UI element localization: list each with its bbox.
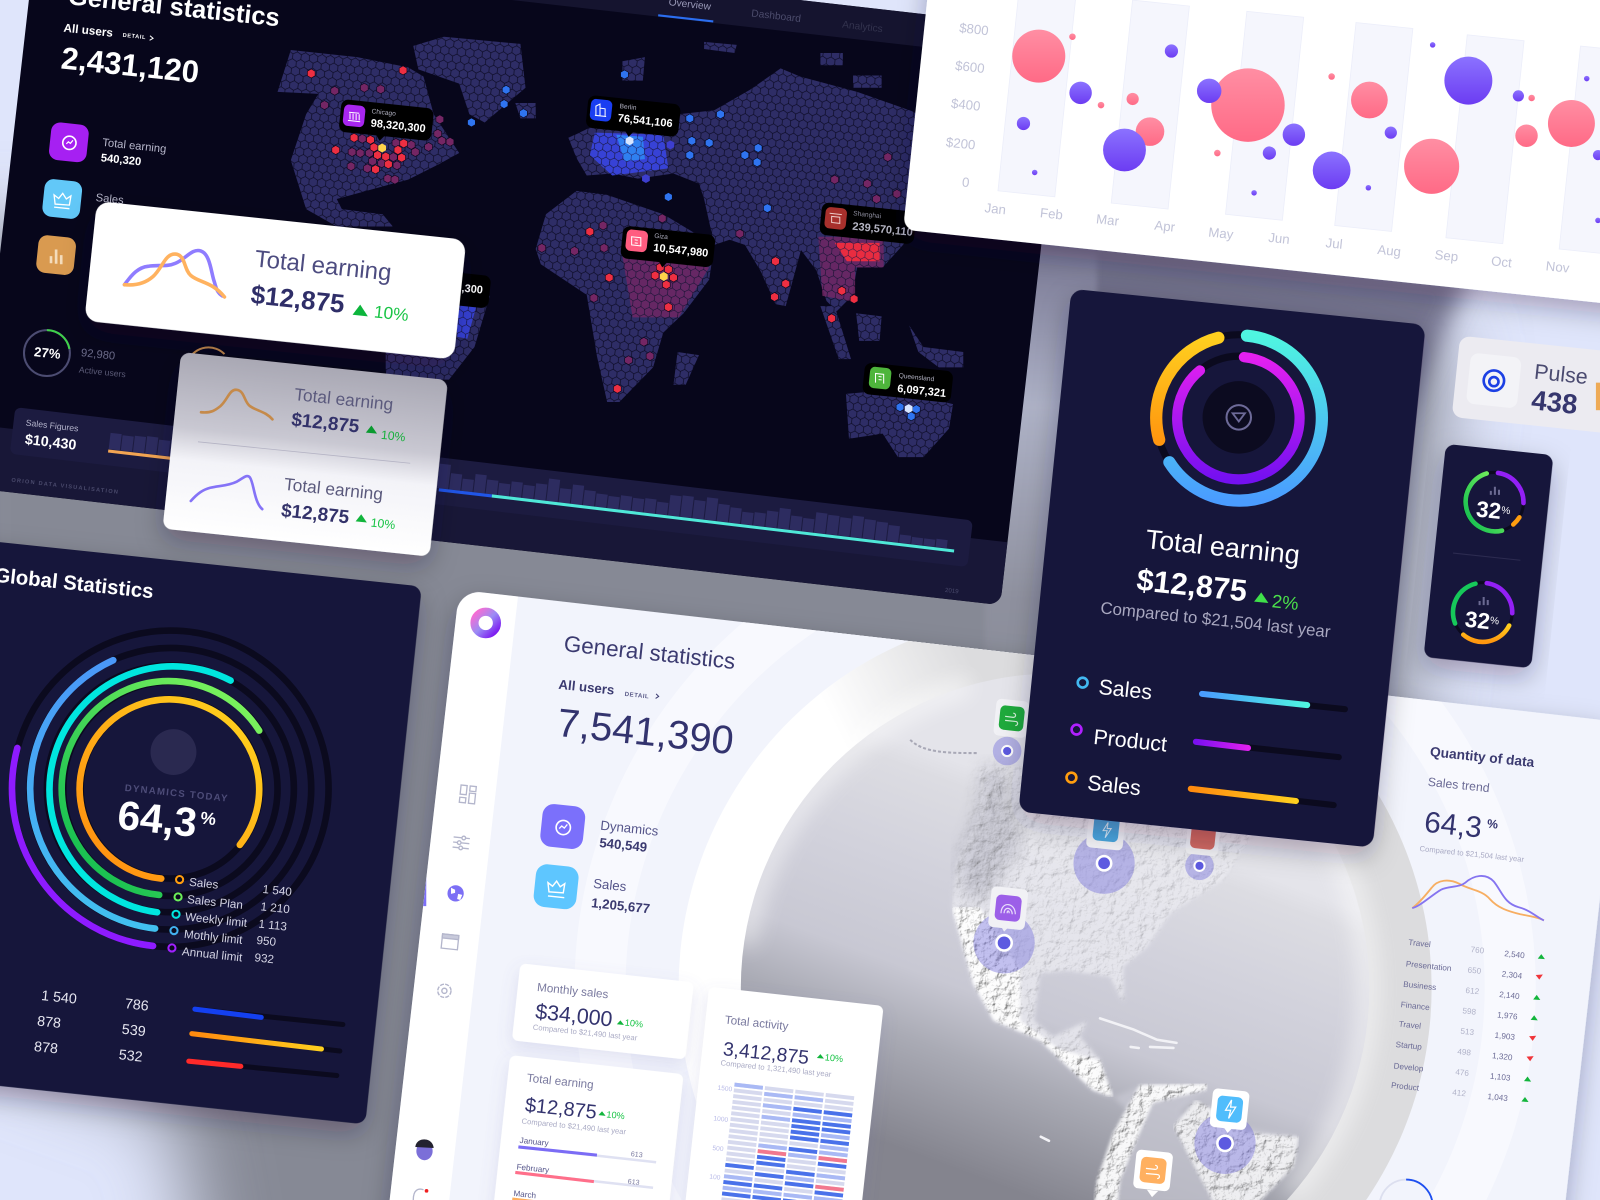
footer band: 2019 [945,587,960,595]
summary numbers: 786 [124,996,149,1015]
summary numbers: 532 [118,1047,143,1066]
label: Berlin [585,95,681,137]
data table: 476 [1455,1068,1470,1078]
y axis labels [945,20,989,190]
summary bars [189,1009,343,1076]
gauge one [1464,472,1523,532]
card: total activity heatmap: 3,412,875 [722,1038,810,1069]
data table: 2,140 [1499,990,1520,1001]
data table: 498 [1457,1047,1472,1058]
card: total earning stacked: 10% [380,428,406,444]
label: Queensland: Queensland [898,373,935,383]
heading: general statistics: General statistics [563,631,737,674]
icon: globe active [424,876,464,906]
gauge: active users 27% [24,330,224,379]
legend with progress bars: Sales [1086,771,1142,800]
ring legend: Annual limit [181,945,244,964]
ring legend: Sales [188,876,219,892]
ring legend: Sales Plan [186,893,244,912]
terrain: alaska range [910,740,978,753]
x axis labels: Oct [1490,253,1513,270]
terrain: south america base [1099,1084,1297,1200]
gauge one: 32 [1475,496,1502,524]
data table: 598 [1462,1006,1477,1017]
data table: 1,103 [1490,1072,1511,1083]
hexagon world map [278,37,980,457]
card: monthly sales: Compared to $21,490 last year [532,1023,638,1043]
card: total earning stacked: 10% [370,516,396,532]
card: total earning: Compared to $21,490 last year [521,1117,627,1136]
stat: sales: Sales [593,876,627,894]
ring legend: Weekly limit [184,910,248,930]
stat: sales: Sales [95,192,125,207]
label: Chicago: 98,320,300 [370,118,426,135]
summary numbers: 878 [33,1039,59,1057]
data table: Travel [1408,938,1431,949]
summary numbers: 1 540 [40,988,78,1008]
x axis labels: Nov [1545,258,1570,276]
all users total: All users [63,22,114,40]
x axis labels [984,200,1570,276]
decorative rings [574,507,1536,1200]
card: total earning: February [516,1162,550,1175]
pink bubbles [1012,30,1595,194]
card: total earning stacked: $12,875 [280,499,350,527]
card: total activity heatmap: 1000 [713,1115,729,1124]
y axis labels: $800 [958,20,989,38]
ring centre value: 64,3 [115,792,199,846]
radial progress rings [12,631,329,947]
card: monthly sales: Monthly sales [536,981,609,1001]
top navigation band [514,0,926,46]
purple bubbles [1017,42,1600,223]
data table: 2,304 [1501,970,1523,981]
label: Shanghai: Shanghai [853,210,882,220]
terrain: western mountains [957,767,1022,898]
stat: sales: 1,205,677 [591,895,651,916]
label: Chicago [338,99,434,141]
label: Giza: 10,547,980 [653,242,709,260]
sidebar [383,590,518,1200]
data table: Develop [1393,1061,1424,1074]
sales trend value: 64,3 [1423,806,1483,845]
x axis labels: Jan [984,200,1007,217]
panel: total earning rings: Compared to $21,504 last year [1100,598,1332,641]
label: Chicago: Chicago [371,108,396,118]
panel: small gauges [1424,444,1553,668]
card: total activity heatmap: Compared to 1,321,490 last year [720,1058,832,1079]
gauge one: % [1501,505,1511,517]
sales figures bar timeline [10,407,973,567]
avatar [407,1132,442,1170]
sales trend value [1419,775,1525,864]
stat: total earning: 540,320 [100,152,142,168]
all users total: DETAIL [122,33,146,41]
summary numbers: 878 [36,1014,62,1032]
data table: 650 [1467,965,1482,976]
map marker: south america [1133,1149,1173,1197]
card: total earning: January [519,1136,550,1148]
ring legend: 1 113 [258,918,288,934]
sales trend value: Compared to $21,504 last year [1419,844,1525,864]
stat: sales [533,863,651,916]
icon: card [441,934,459,950]
map marker: brazil [1194,1088,1256,1174]
x axis labels: Apr [1154,218,1176,235]
limb glow [1112,679,1368,1194]
x axis labels: Feb [1039,205,1064,223]
data table: 1,903 [1494,1031,1516,1042]
card: total earning: 613 [630,1150,643,1159]
x axis labels: Aug [1377,242,1402,259]
label: Berlin: Berlin [619,103,637,112]
card: total earning: 613 [627,1178,640,1187]
map marker: west canada [993,698,1029,765]
legend with progress bars [1067,675,1345,805]
terrain: mexico and central america ridge [952,907,1113,1097]
sparkline [124,250,224,297]
panel: global statistics [0,536,422,1124]
icon: sliders [452,835,470,851]
donut chart [1156,335,1322,501]
data table: Startup [1395,1040,1423,1052]
label: partly hidden city: 0,300 [455,282,483,297]
all users total: All users [558,677,615,698]
data table: Presentation [1405,959,1452,973]
stat: dynamics: 540,549 [599,835,648,855]
label: Shanghai: 239,570,110 [852,221,913,239]
map marker: east usa [1185,817,1221,880]
card: total activity heatmap: 100 [709,1174,721,1182]
gauge two: % [1489,616,1500,627]
gauge two [1453,583,1512,642]
label: Giza [620,226,716,268]
panel: total earning rings: $12,875 [1135,563,1249,608]
stat: dynamics [539,803,659,855]
card: total earning stacked: Total earning [293,384,394,414]
data table: 1,976 [1497,1010,1518,1022]
data table [1391,938,1545,1103]
map marker: central usa [1073,806,1135,894]
all users total [61,24,198,82]
stat: dynamics: Dynamics [600,818,659,839]
data table: 412 [1452,1088,1467,1098]
label: Giza: Giza [654,233,668,241]
heatmap grid [735,1084,840,1200]
card: total earning large: Total earning [253,245,393,287]
sales figures bar timeline: Sales Figures [25,418,80,434]
x axis labels: Mar [1095,211,1120,229]
data table: 2,540 [1504,949,1526,960]
ring legend: 1 210 [260,900,291,916]
terrain: brazil highlands [1173,1100,1299,1200]
total earning text: Total earning [1144,524,1301,570]
card: monthly sales [512,963,694,1059]
y axis labels: $600 [954,58,985,76]
card: total earning: March [513,1189,537,1200]
purple sparkline [191,476,262,509]
ring legend: Mothly limit [183,928,244,947]
y axis labels: 0 [961,174,970,190]
sales trend value: Sales trend [1427,775,1490,795]
logo [474,612,497,634]
gauge two: 32 [1464,607,1491,634]
card: total earning: Total earning [526,1072,594,1092]
gauge: active users 27%: Active users [78,364,127,379]
heading: quantity of data: Quantity of data [1429,744,1535,770]
card: total earning large: $12,875 [249,279,346,319]
card: total earning stacked: $12,875 [290,409,360,437]
panel: general statistics with globe [355,507,1600,1200]
gauge: active users 27%: 92,980 [80,347,116,363]
icon: settings gear [438,984,451,997]
legend with progress bars: Product [1092,725,1168,757]
month stripes [998,0,1600,255]
card: total earning stacked [163,352,448,557]
label: Queensland: 6,097,321 [897,383,947,400]
card: total earning stacked: Total earning [283,474,384,504]
terrain base: north america [952,766,1297,1097]
ring centre value: DYNAMICS TODAY [124,783,229,805]
card: pulse: Pulse [1533,360,1589,389]
x axis labels: May [1208,225,1234,242]
top navigation band: Dashboard [751,8,802,25]
card: total activity heatmap: 500 [712,1145,724,1153]
x axis labels: Jun [1268,230,1290,247]
footer band: ORION DATA VISUALISATION [11,478,119,496]
sales trend value: % [1486,817,1499,832]
data table: Travel [1398,1020,1422,1031]
card: monthly sales: 10% [624,1018,644,1029]
top navigation band: Analytics [841,20,883,35]
summary numbers: 539 [121,1022,146,1040]
card: total activity heatmap: 10% [824,1052,844,1064]
data table: Business [1403,980,1437,992]
data table: Finance [1400,1000,1431,1012]
ring centre value: % [200,808,217,829]
card: total earning: 10% [606,1109,625,1121]
card: pulse: 438 [1530,384,1579,420]
label: Queensland [862,362,954,403]
card: monthly sales: $34,000 [534,999,614,1031]
data table: Product [1391,1081,1420,1093]
footer band [0,425,1007,605]
ring legend [168,876,293,966]
data table: 1,043 [1487,1092,1509,1103]
card: total activity heatmap [682,987,884,1200]
ring centre value [115,729,229,846]
stat: total earning: Total earning [102,137,167,156]
terrain: andes ridge [1094,1084,1207,1200]
card: total earning large: 10% [373,301,410,325]
orange sparkline [201,390,272,419]
ring legend: 1 540 [262,883,293,899]
label: Berlin: 76,541,106 [617,112,673,130]
legend with progress bars: Sales [1097,675,1153,704]
stat: total earning [48,122,167,168]
label: partly hidden city [459,273,491,308]
gauge: active users 27%: 27% [33,344,62,362]
label: Shanghai [819,202,917,244]
map marker: mexico [973,886,1035,973]
summary numbers [33,988,149,1066]
all users total: DETAIL [624,691,650,700]
y axis labels: $200 [945,134,976,152]
icon: notification [413,1189,428,1200]
sales figures bar timeline: $10,430 [24,432,77,454]
icon: dashboard [459,785,476,804]
x axis labels: Sep [1434,247,1459,264]
globe [741,673,1369,1200]
icon: pulse [1484,370,1504,391]
terrain: caribbean islands [1041,1018,1177,1141]
ring legend: 932 [254,951,275,966]
all users total: 7,541,390 [555,701,736,763]
card: total earning large [84,201,466,360]
data table: 612 [1465,986,1480,996]
card: total activity heatmap: 1500 [717,1085,733,1093]
data table: 1,320 [1492,1051,1513,1062]
data table: 513 [1460,1027,1475,1037]
sales trend line chart [1412,876,1544,920]
stat: sales [41,178,125,220]
ring legend: 950 [256,934,277,949]
card: total earning: $12,875 [524,1094,598,1124]
panel: bubble chart [903,0,1600,315]
card: total activity heatmap: Total activity [724,1014,789,1033]
stat: tile orange [35,234,77,276]
panel: total earning rings [1018,289,1426,848]
terrain texture: north america [952,766,1297,1097]
y axis labels: $400 [950,96,981,114]
data table: 760 [1470,945,1485,956]
panel: world hex map dashboard [0,0,1066,605]
x axis labels: Jul [1325,235,1343,252]
card: pulse [1452,336,1600,440]
panel: total earning rings: 2% [1271,590,1300,614]
bottom gauge [1380,1180,1433,1200]
card: total earning [488,1055,684,1200]
all users total: 2,431,120 [59,41,201,90]
